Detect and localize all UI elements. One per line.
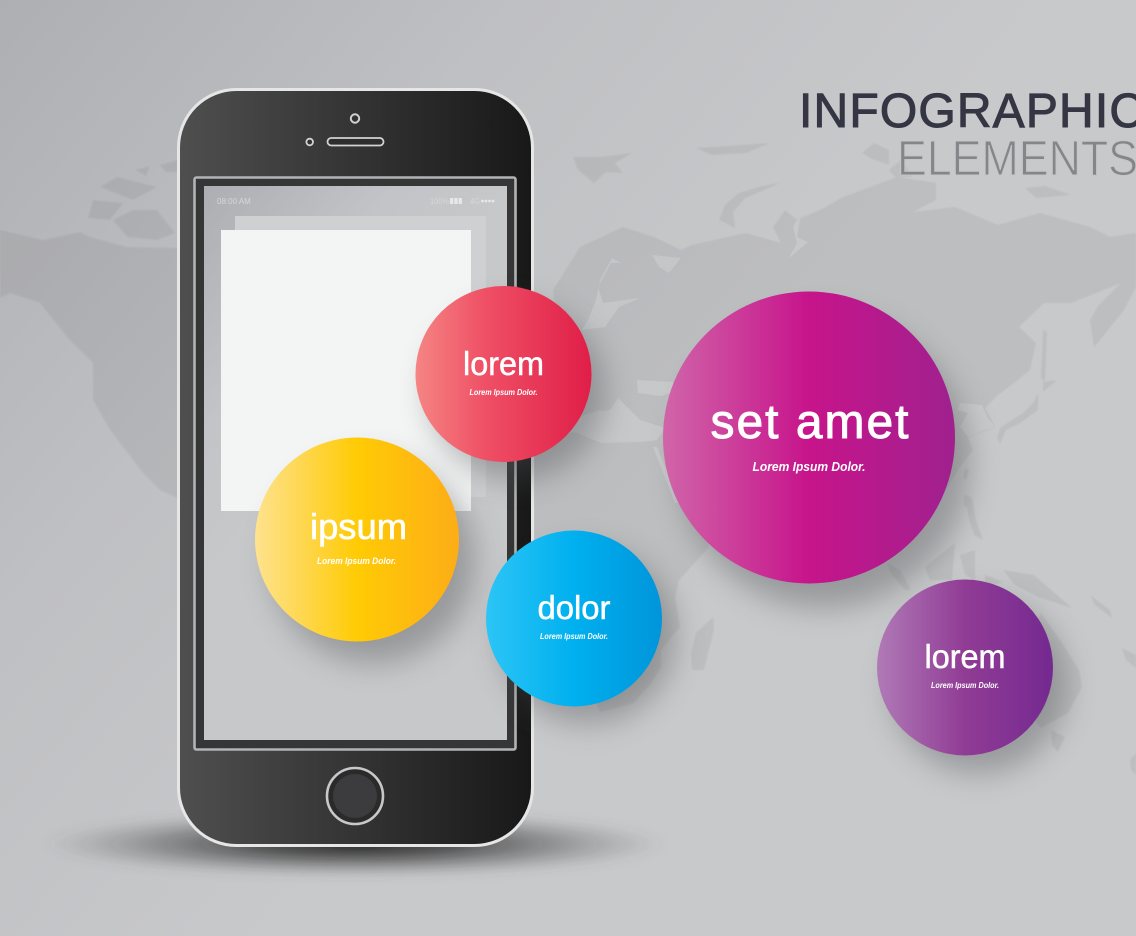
map: australia (990, 613, 1082, 728)
map: pacific islands (1090, 595, 1112, 618)
map: svalbard (574, 154, 628, 182)
phone body (178, 90, 532, 846)
map: eurasia (553, 177, 1136, 560)
circle: dolor blue (486, 530, 676, 724)
front card (221, 230, 471, 511)
map: arctic islands (88, 160, 178, 240)
map: southeast asia islands (887, 495, 1003, 590)
map: madagascar (691, 617, 714, 670)
map: africa (534, 432, 709, 712)
circle: dolor blue: Lorem Ipsum Dolor. (540, 632, 608, 641)
camera (351, 114, 359, 123)
phone shadow (43, 811, 667, 877)
map: tasmania (1052, 732, 1064, 750)
circle: lorem purple (877, 580, 1067, 773)
map: new siberian islands (1027, 186, 1066, 198)
circle: dolor blue: dolor (538, 589, 610, 626)
map: sakhalin (1042, 332, 1046, 380)
speaker (328, 138, 384, 146)
circle: lorem purple: lorem (924, 638, 1006, 675)
status: battery: 100% (430, 197, 449, 206)
circle: ipsum yellow (255, 438, 475, 663)
world map (0, 143, 1136, 775)
back card (235, 216, 486, 497)
status bar (217, 197, 494, 206)
circle: ipsum yellow: ipsum (310, 506, 407, 547)
map: novaya zemlya (720, 185, 773, 226)
status: signal: 4G (470, 197, 480, 206)
screen frame (194, 178, 516, 750)
sensor (306, 139, 313, 145)
circle: set amet (663, 292, 970, 608)
map: japan (998, 381, 1054, 442)
circle: ipsum yellow: Lorem Ipsum Dolor. (317, 556, 396, 566)
map: kamchatka (1090, 283, 1136, 347)
status: signal (470, 197, 494, 206)
heading: infographic: INFOGRAPHIC (799, 85, 1136, 138)
home button (327, 768, 383, 824)
title (799, 85, 1136, 186)
circle: lorem red: lorem (463, 345, 544, 382)
map: franz josef land (700, 144, 764, 154)
circle: lorem red (416, 286, 605, 480)
screen (204, 186, 507, 740)
status: time: 08:00 AM (217, 197, 251, 206)
map: new zealand (1124, 650, 1136, 773)
map: new guinea (1003, 570, 1072, 608)
map: severnaya zemlya (864, 144, 912, 176)
circle: lorem red: Lorem Ipsum Dolor. (470, 388, 538, 397)
status: battery (430, 197, 462, 206)
circle: set amet: Lorem Ipsum Dolor. (752, 459, 866, 474)
map: north america (0, 230, 178, 498)
circle: lorem purple: Lorem Ipsum Dolor. (931, 681, 999, 690)
circle: set amet: set amet (710, 396, 908, 449)
phone (178, 90, 532, 846)
map: taiwan and hainan (964, 470, 968, 506)
